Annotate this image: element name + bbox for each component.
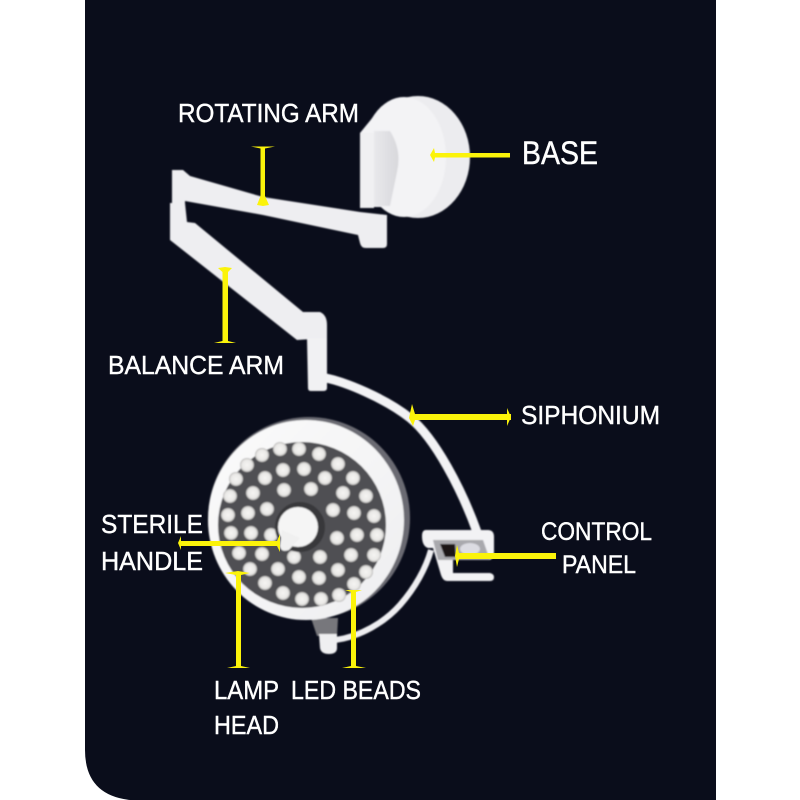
label: lamp head: LAMP [214, 675, 279, 705]
label: base: BASE [522, 135, 598, 171]
label: control panel [541, 518, 652, 579]
label: sterile handle: STERILE [101, 509, 203, 539]
siphonium arc [326, 378, 477, 532]
label: sterile handle: HANDLE [101, 546, 203, 576]
label: sterile handle [101, 509, 203, 576]
lamp head rim [208, 420, 404, 620]
label: lamp head: HEAD [214, 710, 279, 740]
lamp mount [311, 618, 338, 654]
LED face [218, 442, 386, 608]
label: siphonium: SIPHONIUM [521, 400, 660, 430]
yellow arrow: siphonium [409, 404, 511, 426]
yellow arrow: base [430, 148, 510, 162]
base [360, 96, 470, 218]
label: balance arm: BALANCE ARM [108, 350, 284, 380]
label: control panel: CONTROL [541, 518, 652, 546]
sterile handle [275, 502, 325, 552]
vertical post [307, 338, 327, 391]
rotating arm [172, 170, 387, 248]
illustration: surgical lamp [170, 96, 494, 654]
label: LED beads: LED BEADS [291, 675, 421, 705]
yellow arrow: control panel [455, 545, 556, 567]
yellow arrow: lamp head [225, 571, 250, 668]
label: lamp head [214, 675, 279, 740]
LED beads [221, 442, 384, 606]
balance arm [170, 203, 327, 340]
dark background panel [85, 0, 716, 800]
lamp head housing [208, 417, 410, 619]
control panel [422, 530, 494, 581]
lower thin arc [335, 550, 431, 640]
yellow arrow: sterile handle [178, 534, 280, 552]
yellow arrow: rotating arm [251, 146, 275, 206]
yellow arrow: LED beads [342, 590, 366, 668]
label: rotating arm: ROTATING ARM [178, 98, 359, 128]
label: control panel: PANEL [562, 551, 636, 579]
yellow arrow: balance arm [214, 267, 236, 343]
